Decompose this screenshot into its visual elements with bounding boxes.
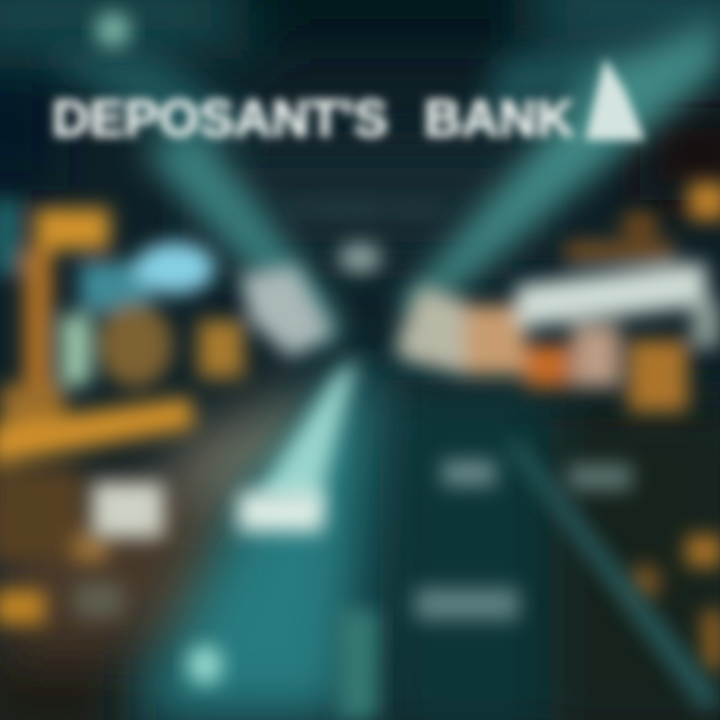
subtitle: faint text line: Subtitle text [290,201,441,218]
ceiling lamp [95,12,131,48]
floor labels: pale blurred signs [75,460,632,620]
panel: right shelves [395,182,720,670]
title: blurred white headline [52,58,645,148]
title: blurred white headline: DEPOSANT'S [52,90,388,148]
title: blurred white headline: BANK [424,90,574,148]
subtitle: faint text line [290,201,441,273]
panel: left shelves [0,200,335,624]
ceiling beams: teal diagonals [40,20,720,345]
floor: teal light reflection [130,358,720,720]
